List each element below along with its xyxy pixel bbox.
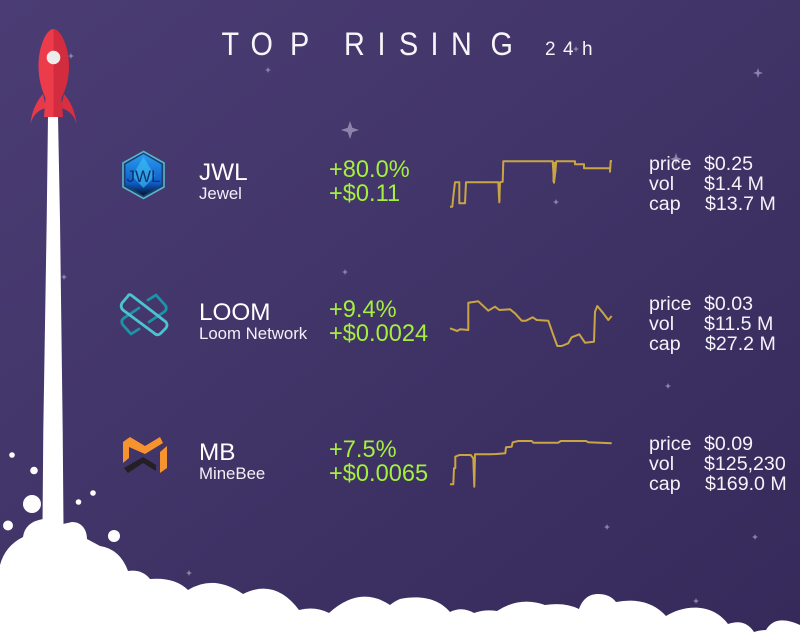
stats: $125,230 xyxy=(704,453,786,475)
stats: $1.4 M xyxy=(704,173,764,195)
stats xyxy=(649,293,776,355)
change dollars: +$0.0024 xyxy=(329,321,428,347)
stats: $0.03 xyxy=(704,293,753,315)
icon: MineBee xyxy=(123,437,167,473)
stats xyxy=(649,153,776,215)
stats: vol xyxy=(649,173,674,195)
stats: $11.5 M xyxy=(704,313,773,335)
ticker: MB xyxy=(199,439,235,466)
change percent: +9.4% xyxy=(329,297,397,323)
smoke bubbles xyxy=(3,452,120,542)
ticker: JWL xyxy=(199,159,248,186)
icon: Loom Network xyxy=(121,295,167,335)
stats: cap xyxy=(649,473,681,495)
row: LOOM xyxy=(121,293,776,355)
change dollars: +$0.0065 xyxy=(329,461,428,487)
sparkline xyxy=(450,161,612,207)
stats: price xyxy=(649,433,692,455)
sparkline xyxy=(450,301,612,346)
smoke cloud xyxy=(0,519,800,634)
rocket xyxy=(30,29,76,124)
stats: cap xyxy=(649,333,681,355)
rocket exhaust trail xyxy=(42,116,64,526)
change percent: +7.5% xyxy=(329,437,397,463)
row: MB xyxy=(123,433,787,495)
row: JWL xyxy=(123,152,776,215)
stats xyxy=(649,433,787,495)
title: TOP RISING xyxy=(221,27,513,62)
icon: Jewel xyxy=(123,152,164,198)
stats: vol xyxy=(649,453,674,475)
stars xyxy=(61,46,763,604)
name: Loom Network xyxy=(199,324,308,343)
change dollars: +$0.11 xyxy=(329,181,400,207)
subtitle: 24 h xyxy=(545,39,593,60)
stats: $13.7 M xyxy=(705,193,776,215)
sparkline xyxy=(450,441,612,487)
stats: $0.09 xyxy=(704,433,753,455)
ticker: LOOM xyxy=(199,299,271,326)
change percent: +80.0% xyxy=(329,157,410,183)
stats: price xyxy=(649,293,692,315)
stats: vol xyxy=(649,313,674,335)
stats: cap xyxy=(649,193,681,215)
stats: $0.25 xyxy=(704,153,753,175)
name: Jewel xyxy=(199,184,242,203)
stats: price xyxy=(649,153,692,175)
stats: $27.2 M xyxy=(705,333,776,355)
icon: Jewel: JWL xyxy=(126,167,160,186)
name: MineBee xyxy=(199,464,265,483)
stats: $169.0 M xyxy=(705,473,787,495)
